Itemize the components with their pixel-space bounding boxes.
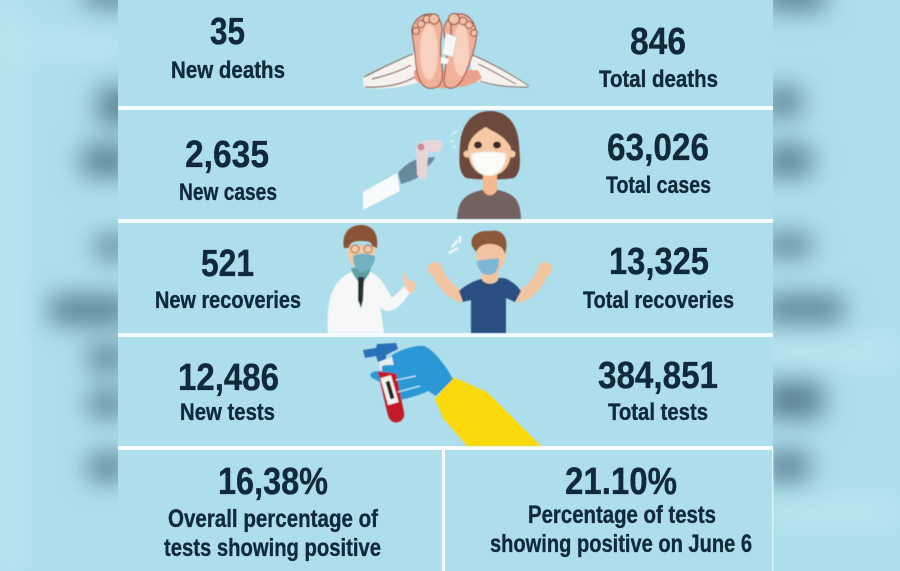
row dividers (118, 106, 774, 571)
row: cases (179, 111, 711, 219)
new recoveries figure: 521 (201, 243, 254, 285)
row: recoveries (155, 225, 734, 333)
row: tests (178, 343, 718, 446)
new recoveries label: New recoveries (155, 287, 301, 314)
row: deaths (171, 11, 718, 93)
total deaths figure: 846 (630, 21, 686, 63)
total recoveries label: Total recoveries (583, 287, 734, 314)
total cases label: Total cases (606, 172, 711, 199)
overall percentage label: tests showing positive (164, 534, 381, 562)
panel: June 6 percentage (490, 461, 752, 558)
overall percentage figure: 16,38% (218, 461, 328, 503)
icon: doctor giving thumbs up (328, 225, 415, 333)
total recoveries figure: 13,325 (609, 241, 709, 283)
total deaths label: Total deaths (599, 66, 718, 93)
icon: feet with toe tag (363, 14, 530, 89)
June 6 percentage label: showing positive on June 6 (490, 530, 752, 558)
total cases figure: 63,026 (607, 127, 709, 169)
panel: overall percentage (164, 461, 381, 562)
total tests label: Total tests (608, 399, 708, 426)
new deaths figure: 35 (210, 11, 245, 53)
main panel (118, 0, 773, 571)
icon: temperature check on woman (363, 111, 521, 219)
June 6 percentage figure: 21.10% (565, 461, 677, 503)
new tests figure: 12,486 (178, 357, 279, 399)
June 6 percentage label: Percentage of tests (528, 501, 716, 529)
icon: gloved hand with blood sample tube (363, 343, 541, 446)
new tests label: New tests (180, 399, 275, 426)
total tests figure: 384,851 (598, 355, 718, 397)
icon: cheering man (428, 230, 552, 333)
overall percentage label (164, 505, 381, 562)
June 6 percentage label (490, 501, 752, 558)
new cases label: New cases (179, 179, 277, 206)
overall percentage label: Overall percentage of (168, 505, 379, 533)
new deaths label: New deaths (171, 57, 285, 84)
new cases figure: 2,635 (185, 134, 269, 176)
